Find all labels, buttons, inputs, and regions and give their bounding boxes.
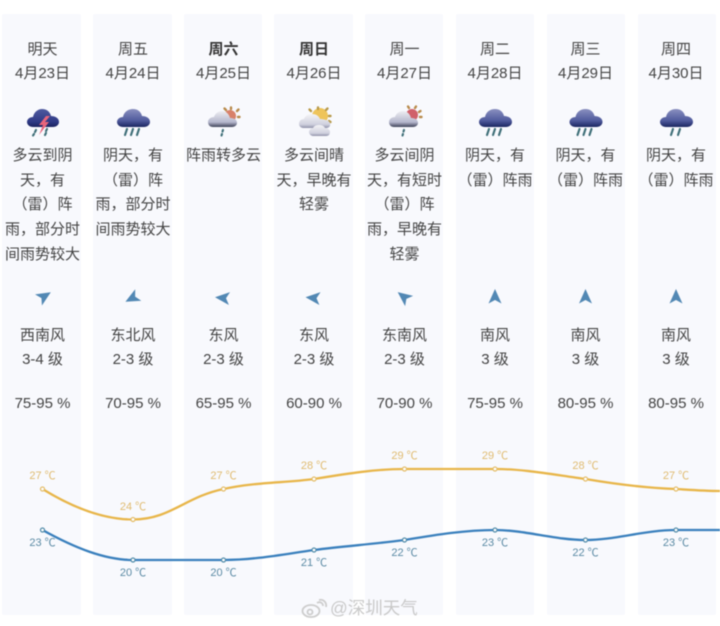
description <box>276 147 352 213</box>
description: 多云间晴 <box>284 147 344 164</box>
description: 间雨势较大 <box>95 220 171 238</box>
chart: high temperature line: 27 ℃ <box>29 470 56 482</box>
humidity: 75-95 % <box>15 395 70 412</box>
description: 轻雾 <box>299 196 329 213</box>
day label: 周三 <box>570 41 601 58</box>
wind: 3 级 <box>481 351 509 368</box>
wind: 2-3 级 <box>203 351 244 368</box>
chart: low temperature line: 21 ℃ <box>301 557 327 569</box>
icon: sun and shower <box>208 108 240 136</box>
chart: high temperature line: 24 ℃ <box>120 501 146 513</box>
description: （雷）阵雨 <box>548 172 623 189</box>
watermark: @深圳天气 <box>330 598 418 618</box>
description: 阴天，有 <box>555 147 616 164</box>
chart: low temperature line: 23 ℃ <box>663 537 689 549</box>
panel: friday <box>93 14 172 615</box>
icon: heavy rain <box>570 109 602 135</box>
wind <box>480 327 510 368</box>
chart: low temperature line: 22 ℃ <box>391 547 418 559</box>
wind: 东风 <box>208 327 239 344</box>
chart: high temperature line: 27 ℃ <box>210 470 237 482</box>
wind: 2-3 级 <box>113 351 153 368</box>
chart: high temperature line <box>29 450 720 522</box>
wind <box>570 327 601 368</box>
wind <box>661 327 691 368</box>
chart: low temperature line: 23 ℃ <box>29 537 56 549</box>
chart: high temperature line: 29 ℃ <box>482 450 508 462</box>
icon: sun and shower <box>389 106 422 136</box>
description <box>367 147 442 263</box>
description: 多云间阴 <box>374 147 435 164</box>
day label: 周六 <box>208 41 239 58</box>
humidity: 60-90 % <box>286 395 342 412</box>
icon: wind arrow <box>214 291 230 305</box>
description: 天，有短时 <box>367 172 442 189</box>
chart: low temperature line: 20 ℃ <box>210 567 237 579</box>
description: 天，早晚有 <box>276 172 352 189</box>
date: 4月30日 <box>648 65 704 82</box>
day label: 周五 <box>118 41 148 58</box>
day label: 周四 <box>661 41 691 58</box>
icon: weibo logo <box>302 600 326 617</box>
description <box>95 147 171 238</box>
wind: 3 级 <box>662 351 690 368</box>
description: 雨，早晚有 <box>367 221 442 238</box>
icon: wind arrow <box>122 289 141 307</box>
date: 4月25日 <box>196 65 251 82</box>
wind: 南风 <box>661 327 691 344</box>
icon: wind arrow <box>394 287 413 306</box>
wind <box>203 327 244 368</box>
wind <box>294 327 334 368</box>
panel: monday <box>365 14 443 615</box>
chart: high temperature line: 29 ℃ <box>391 450 418 462</box>
humidity: 70-95 % <box>105 395 161 412</box>
icon: moderate rain <box>660 109 693 135</box>
icon: heavy rain <box>479 109 512 135</box>
humidity: 80-95 % <box>558 395 613 412</box>
humidity: 70-90 % <box>377 395 432 412</box>
icon: wind arrow <box>488 289 502 304</box>
panel: saturday <box>184 14 262 615</box>
description: （雷）阵雨 <box>638 172 714 189</box>
wind: 西南风 <box>20 327 65 344</box>
day label: 周日 <box>299 41 329 58</box>
humidity: 75-95 % <box>467 395 523 412</box>
panel: thursday <box>638 14 716 615</box>
date: 4月24日 <box>105 65 161 82</box>
description: 阵雨转多云 <box>186 147 261 164</box>
chart: high temperature line: 28 ℃ <box>572 460 599 472</box>
wind <box>110 327 156 368</box>
description: 多云到阴 <box>12 147 73 164</box>
wind <box>20 327 65 368</box>
icon: heavy rain <box>117 109 150 135</box>
description: 轻雾 <box>389 246 420 263</box>
wind: 东风 <box>299 327 329 344</box>
day label: 周一 <box>389 41 420 58</box>
wind <box>382 327 427 368</box>
chart: low temperature line: 20 ℃ <box>120 567 146 579</box>
description <box>5 147 80 263</box>
description: 阴天，有 <box>465 147 525 164</box>
wind: 3-4 级 <box>22 351 63 368</box>
date: 4月27日 <box>377 65 432 82</box>
wind: 3 级 <box>572 351 599 368</box>
humidity: 65-95 % <box>196 395 251 412</box>
wind: 2-3 级 <box>384 351 425 368</box>
description: 阴天，有 <box>646 147 706 164</box>
chart: high temperature line: 28 ℃ <box>301 460 327 472</box>
date: 4月28日 <box>467 65 523 82</box>
panel: tuesday <box>456 14 534 615</box>
icon: wind arrow <box>35 287 54 305</box>
description: 阴天，有 <box>103 147 163 164</box>
day label: 明天 <box>27 41 58 58</box>
description <box>638 147 714 189</box>
date: 4月26日 <box>286 65 342 82</box>
description: 天，有 <box>20 172 65 189</box>
panel: sunday <box>274 14 353 615</box>
wind: 南风 <box>480 327 510 344</box>
icon: wind arrow <box>305 291 321 305</box>
description: （雷）阵 <box>103 172 163 189</box>
date: 4月23日 <box>15 65 70 82</box>
wind: 2-3 级 <box>294 351 334 368</box>
description: 雨，部分时 <box>5 221 80 238</box>
panel: tomorrow <box>2 14 81 615</box>
panel: wednesday <box>547 14 625 615</box>
description: （雷）阵 <box>374 196 435 213</box>
description: （雷）阵雨 <box>457 172 533 189</box>
chart: low temperature line: 22 ℃ <box>572 547 599 559</box>
description: 间雨势较大 <box>5 245 80 263</box>
icon: partly cloudy <box>299 108 330 136</box>
chart: high temperature line: 27 ℃ <box>663 470 689 482</box>
icon: wind arrow <box>670 289 682 304</box>
description <box>548 147 623 189</box>
wind: 东北风 <box>110 327 156 344</box>
chart: low temperature line: 23 ℃ <box>482 537 508 549</box>
date: 4月29日 <box>558 65 613 82</box>
description: （雷）阵 <box>12 196 73 213</box>
day label: 周二 <box>480 41 510 58</box>
wind: 南风 <box>570 327 601 344</box>
wind: 东南风 <box>382 327 427 344</box>
description <box>457 147 533 189</box>
description: 雨，部分时 <box>95 196 171 213</box>
humidity: 80-95 % <box>648 395 704 412</box>
icon: wind arrow <box>579 289 592 304</box>
chart: low temperature line <box>29 528 720 579</box>
icon: thunderstorm <box>27 109 59 136</box>
